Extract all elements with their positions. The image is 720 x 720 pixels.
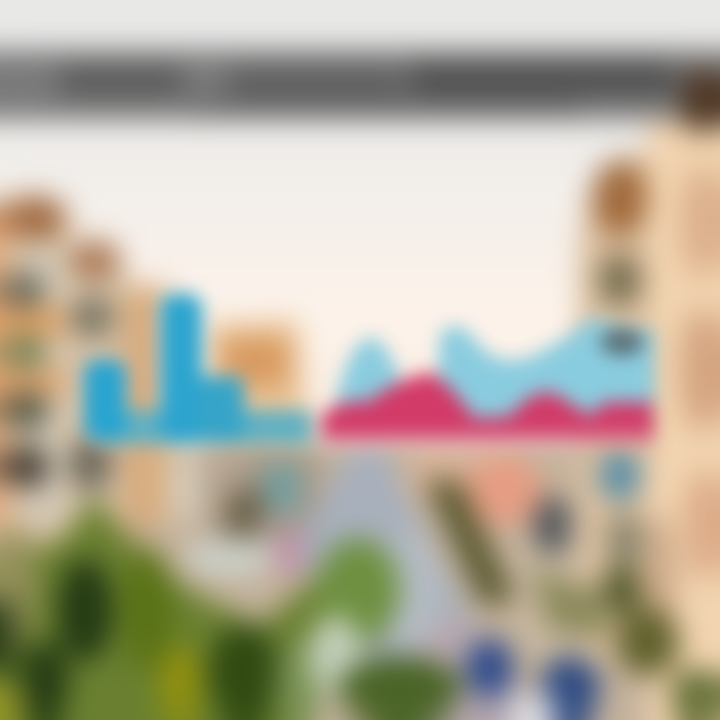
left building windows <box>5 271 114 490</box>
foreground shrub <box>338 656 720 720</box>
right building windows <box>533 254 643 616</box>
area chart: crimson series <box>322 372 654 444</box>
area chart: light blue series <box>335 318 654 432</box>
right buildings <box>578 120 720 720</box>
window showing through area <box>600 328 644 356</box>
orange wall patches <box>8 306 64 396</box>
orange building <box>206 320 306 440</box>
right roof and windows <box>533 66 720 616</box>
bar 3 <box>198 376 244 440</box>
bar chart: blue bars <box>84 294 311 444</box>
bar 1 <box>84 360 126 440</box>
street road <box>296 445 540 720</box>
street level backdrop <box>0 440 720 720</box>
header band <box>0 50 720 120</box>
vehicles <box>466 638 600 720</box>
street details <box>184 454 680 676</box>
title text placeholder blocks <box>60 62 675 114</box>
left buildings <box>0 194 167 540</box>
bar base <box>100 410 311 444</box>
chart layer <box>84 294 654 444</box>
left roof domes <box>6 196 121 280</box>
bar 2 <box>160 294 202 442</box>
bright pavement <box>309 615 361 695</box>
foreground palm foliage <box>0 495 400 720</box>
